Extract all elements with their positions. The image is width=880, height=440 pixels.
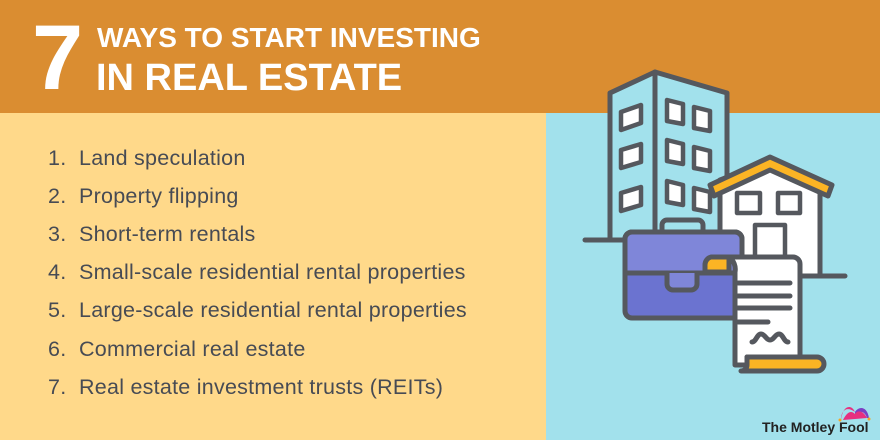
list of ways: Commercial real estate: [79, 337, 306, 361]
title: [32, 7, 481, 109]
list of ways: Small-scale residential rental properties: [79, 260, 466, 284]
list of ways: 4.: [48, 260, 66, 284]
icon: briefcase: [625, 220, 742, 318]
list of ways: 6.: [48, 337, 66, 361]
list of ways: Short-term rentals: [79, 222, 256, 246]
list of ways: Large-scale residential rental properties: [79, 298, 467, 322]
list of ways: 2.: [48, 184, 66, 208]
header band: [0, 0, 880, 113]
logo text: The Motley Fool: [762, 419, 869, 435]
list of ways: 7.: [48, 375, 66, 399]
list of ways: Property flipping: [79, 184, 239, 208]
list of ways: [48, 146, 467, 399]
icon: jester hat: [838, 407, 870, 422]
list of ways: Real estate investment trusts (REITs): [79, 375, 443, 399]
icon: ground line left: [585, 238, 640, 242]
title line 2: IN REAL ESTATE: [96, 57, 402, 99]
icon: apartment building: [610, 72, 727, 240]
list of ways: 5.: [48, 298, 66, 322]
title number 7: 7: [32, 7, 83, 109]
list of ways: Land speculation: [79, 146, 246, 170]
list of ways: 1.: [48, 146, 66, 170]
logo: The Motley Fool: [762, 407, 870, 435]
icon: house: [710, 157, 845, 276]
title line 1: WAYS TO START INVESTING: [97, 22, 481, 53]
left list panel: [0, 113, 546, 440]
list of ways: 3.: [48, 222, 66, 246]
icon: contract document: [705, 257, 824, 371]
